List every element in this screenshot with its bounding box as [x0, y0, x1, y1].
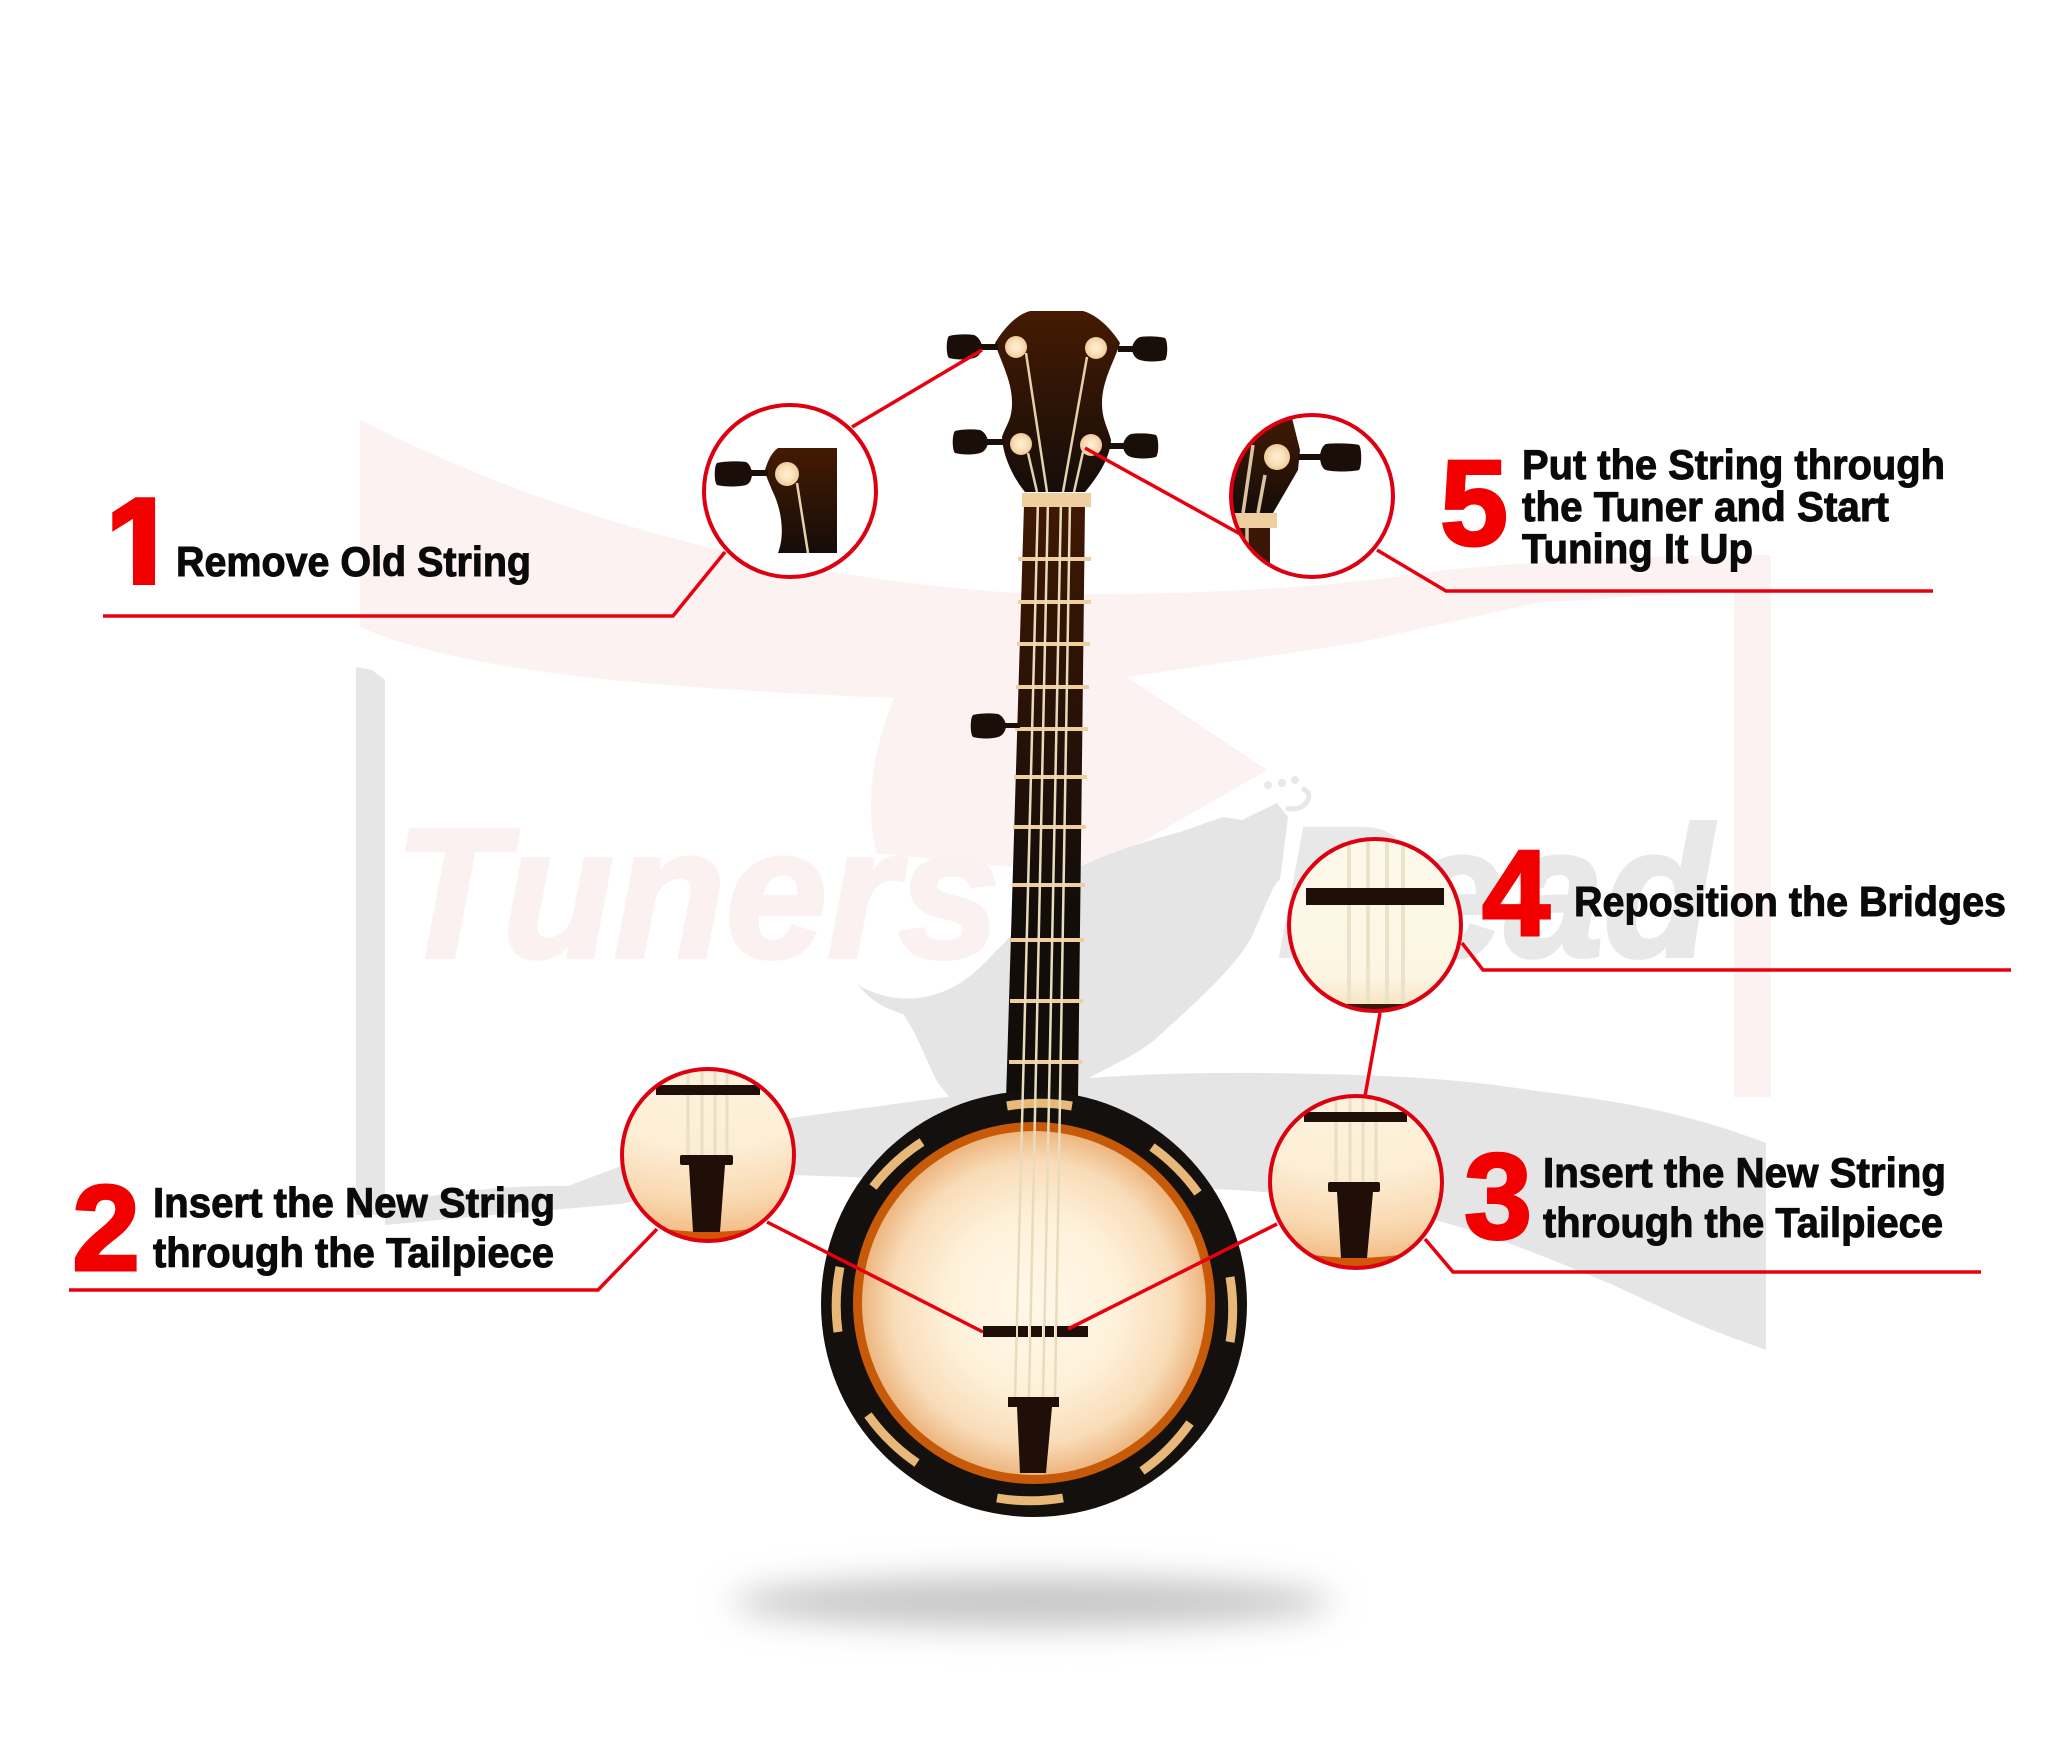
watermark: grey banjo silhouette	[858, 803, 1288, 1110]
step 1 number	[112, 497, 156, 585]
orange ring	[853, 1122, 1215, 1484]
watermark: grey swoosh	[385, 1073, 1766, 1350]
step 3 label: through the Tailpiece	[1543, 1199, 1943, 1246]
step 5 leader to peg	[1085, 448, 1242, 535]
step 1 zoom circle	[704, 405, 876, 577]
step 3 zoom circle	[1268, 1094, 1444, 1270]
nut	[1022, 493, 1091, 507]
step 5 callout	[1085, 410, 1945, 591]
step 1 number: 1	[106, 474, 176, 613]
banjo pot: rim	[821, 1091, 1247, 1517]
step 5 base line	[1377, 550, 1933, 591]
step 2 label	[153, 1179, 555, 1276]
step 1 leader lines	[103, 350, 982, 616]
headstock strings	[1026, 353, 1087, 492]
banjo neck	[1006, 505, 1085, 1100]
step 3 label	[1543, 1149, 1946, 1246]
neck frets	[1009, 557, 1091, 1064]
step 3 leader lines	[1068, 1224, 1981, 1329]
headstock	[995, 311, 1120, 492]
tuners	[947, 334, 1167, 458]
step 5 label: Tuning It Up	[1522, 525, 1753, 572]
step 4 leader lines	[1365, 943, 2011, 1096]
step 4 callout	[1287, 825, 2011, 1096]
step 3 label: Insert the New String	[1543, 1149, 1946, 1196]
step 3 callout	[1067, 1094, 1981, 1331]
step 5 number: 5	[1440, 435, 1508, 571]
watermark: pink swoosh	[360, 420, 1771, 1097]
watermark: banjo scroll	[1264, 776, 1309, 809]
tailpiece	[1008, 1397, 1059, 1473]
step 2 zoom circle	[620, 1067, 796, 1243]
watermark logo	[356, 420, 1771, 1350]
side tuner	[971, 713, 1020, 738]
drum head	[862, 1131, 1206, 1475]
step 2 number: 2	[72, 1160, 140, 1296]
tuning pegs	[1005, 336, 1107, 456]
step 2 leader lines	[69, 1222, 983, 1332]
step 4 number: 4	[1482, 825, 1550, 961]
step 5 label: Put the String through	[1522, 441, 1945, 488]
step 5 zoom circle	[1228, 410, 1393, 577]
watermark: grey bar	[356, 667, 385, 1215]
strings	[1015, 500, 1070, 1397]
step 4 zoom circle	[1287, 838, 1463, 1014]
rim inlays	[836, 1103, 1233, 1501]
step 3 number: 3	[1464, 1128, 1532, 1264]
step 5 label	[1522, 441, 1945, 572]
step 1 callout	[103, 350, 982, 616]
step 2 label: through the Tailpiece	[153, 1229, 554, 1276]
step 4 label: Reposition the Bridges	[1574, 878, 2006, 925]
banjo illustration	[821, 311, 1247, 1517]
watermark text: Tuners: Tuners	[394, 791, 1000, 997]
bridge	[983, 1326, 1088, 1337]
step 2 label: Insert the New String	[153, 1179, 555, 1226]
step 2 callout	[69, 1067, 984, 1334]
banjo floor shadow	[732, 1576, 1332, 1628]
step 5 label: the Tuner and Start	[1522, 483, 1889, 530]
watermark text: Read: Read	[1278, 790, 1716, 996]
step 1 label: Remove Old String	[176, 538, 531, 585]
